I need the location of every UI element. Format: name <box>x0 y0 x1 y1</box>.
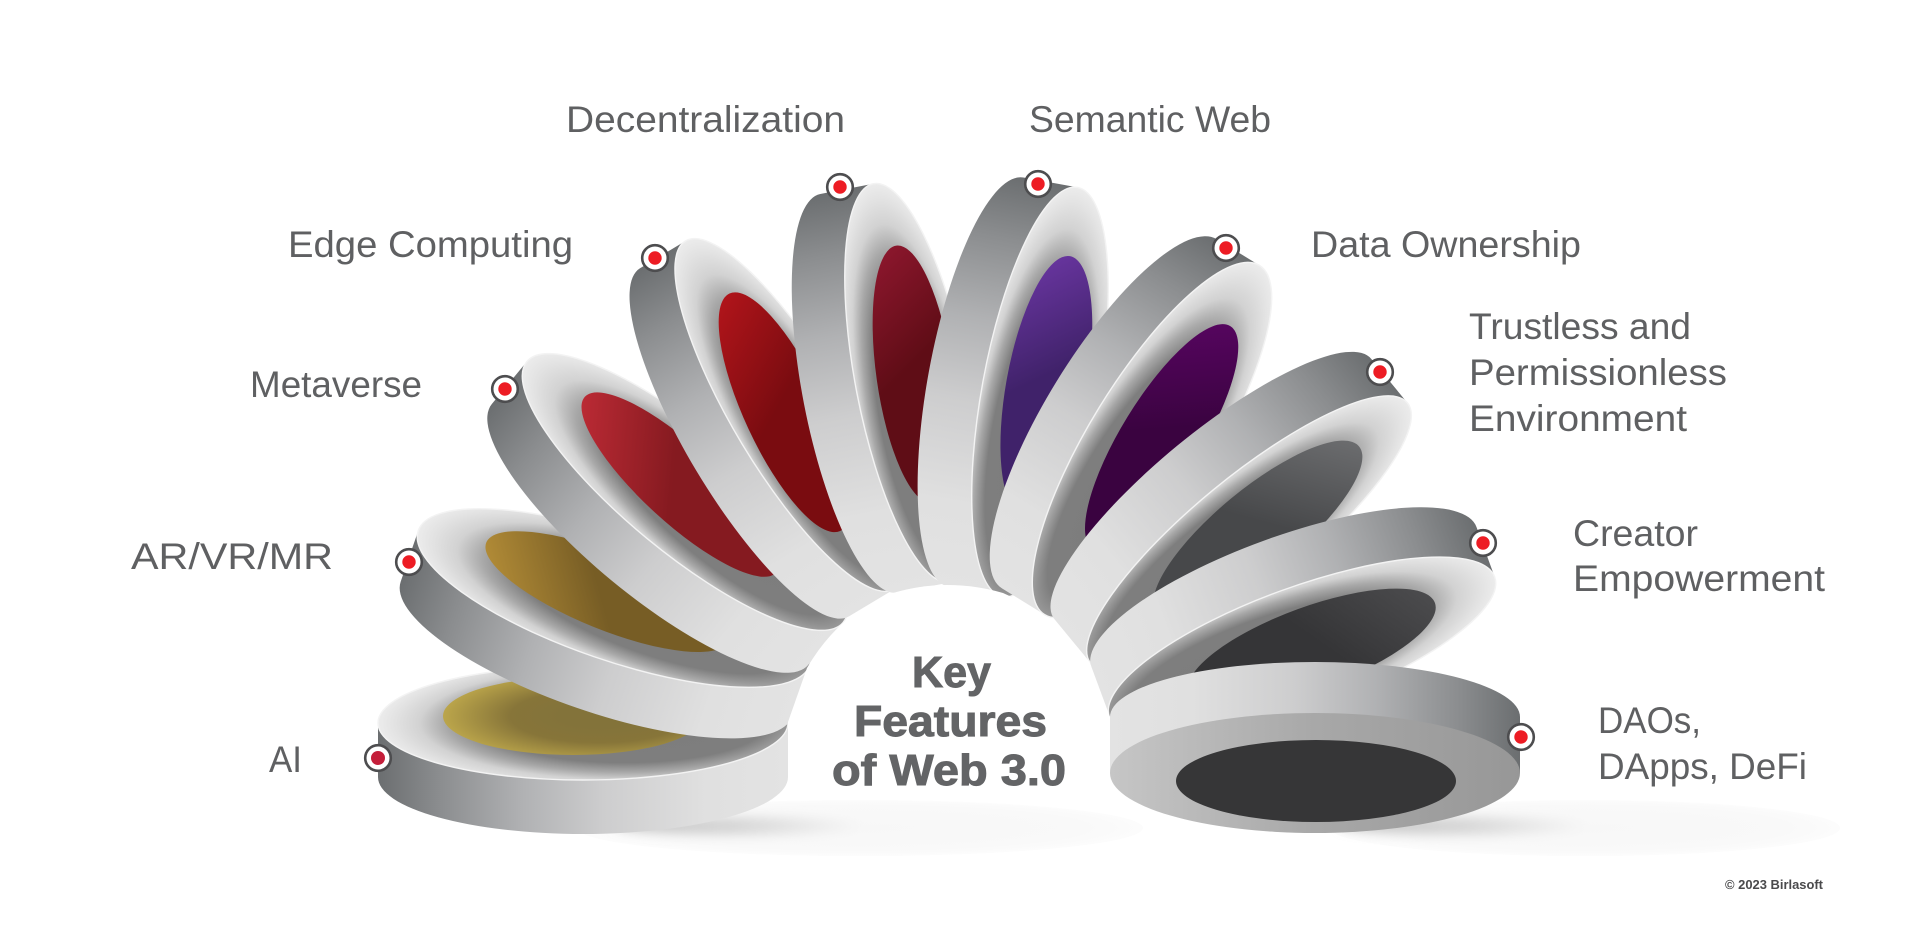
marker: Metaverse <box>492 376 518 402</box>
title: Key Features of Web 3.0: Features <box>854 697 1047 746</box>
title: Key Features of Web 3.0 <box>832 648 1066 795</box>
marker: DAOs <box>1508 724 1534 750</box>
label: Creator Empowerment: Empowerment <box>1573 558 1826 599</box>
disc: Edge Computing <box>592 212 943 645</box>
disc: DAOs, DApps, DeFi <box>1110 662 1520 833</box>
label: DAOs, DApps, DeFi <box>1598 700 1807 787</box>
disc: Semantic Web <box>891 167 1135 607</box>
label: Trustless and Permissionless Environment <box>1469 306 1727 439</box>
marker: Creator Empowerment <box>1470 530 1496 556</box>
title: Key Features of Web 3.0: of Web 3.0 <box>832 746 1066 795</box>
disc: Creator Empowerment <box>1071 471 1515 773</box>
label: Trustless and Permissionless Environment: Environment <box>1469 398 1688 439</box>
ground shadow: left <box>577 800 1143 856</box>
marker: Edge Computing <box>642 245 668 271</box>
label: DAOs, DApps, DeFi: DAOs, <box>1598 700 1701 741</box>
marker: AR/VR/MR <box>396 549 422 575</box>
label: Data Ownership: Data Ownership <box>1311 224 1581 265</box>
disc: Data Ownership <box>949 207 1312 647</box>
marker: Semantic Web <box>1025 171 1051 197</box>
title: Key Features of Web 3.0: Key <box>912 648 992 697</box>
marker: Data Ownership <box>1213 235 1239 261</box>
center hub <box>788 585 1110 791</box>
disc: AI <box>378 666 788 834</box>
label: AI: AI <box>269 739 302 780</box>
disc: Metaverse <box>454 315 881 711</box>
ground shadow: right <box>1330 800 1840 856</box>
label: AR/VR/MR: AR/VR/MR <box>131 536 333 577</box>
disc: AR/VR/MR <box>381 472 830 775</box>
label: Metaverse: Metaverse <box>250 364 422 405</box>
label: DAOs, DApps, DeFi: DApps, DeFi <box>1598 746 1807 787</box>
label: Edge Computing: Edge Computing <box>288 224 573 265</box>
label: Trustless and Permissionless Environment: Trustless and <box>1469 306 1691 347</box>
label: Semantic Web: Semantic Web <box>1029 99 1271 140</box>
disc: Decentralization <box>765 173 1006 603</box>
marker: Decentralization <box>827 174 853 200</box>
disc: Trustless and Permissionless Environment <box>1019 316 1443 706</box>
copyright: © 2023 Birlasoft <box>1725 878 1824 892</box>
label: Creator Empowerment: Creator <box>1573 513 1698 554</box>
label: Creator Empowerment <box>1573 513 1826 599</box>
marker: Trustless <box>1367 359 1393 385</box>
label: Trustless and Permissionless Environment: Permissionless <box>1469 352 1727 393</box>
marker: AI <box>365 745 391 771</box>
label: Decentralization: Decentralization <box>566 99 845 140</box>
